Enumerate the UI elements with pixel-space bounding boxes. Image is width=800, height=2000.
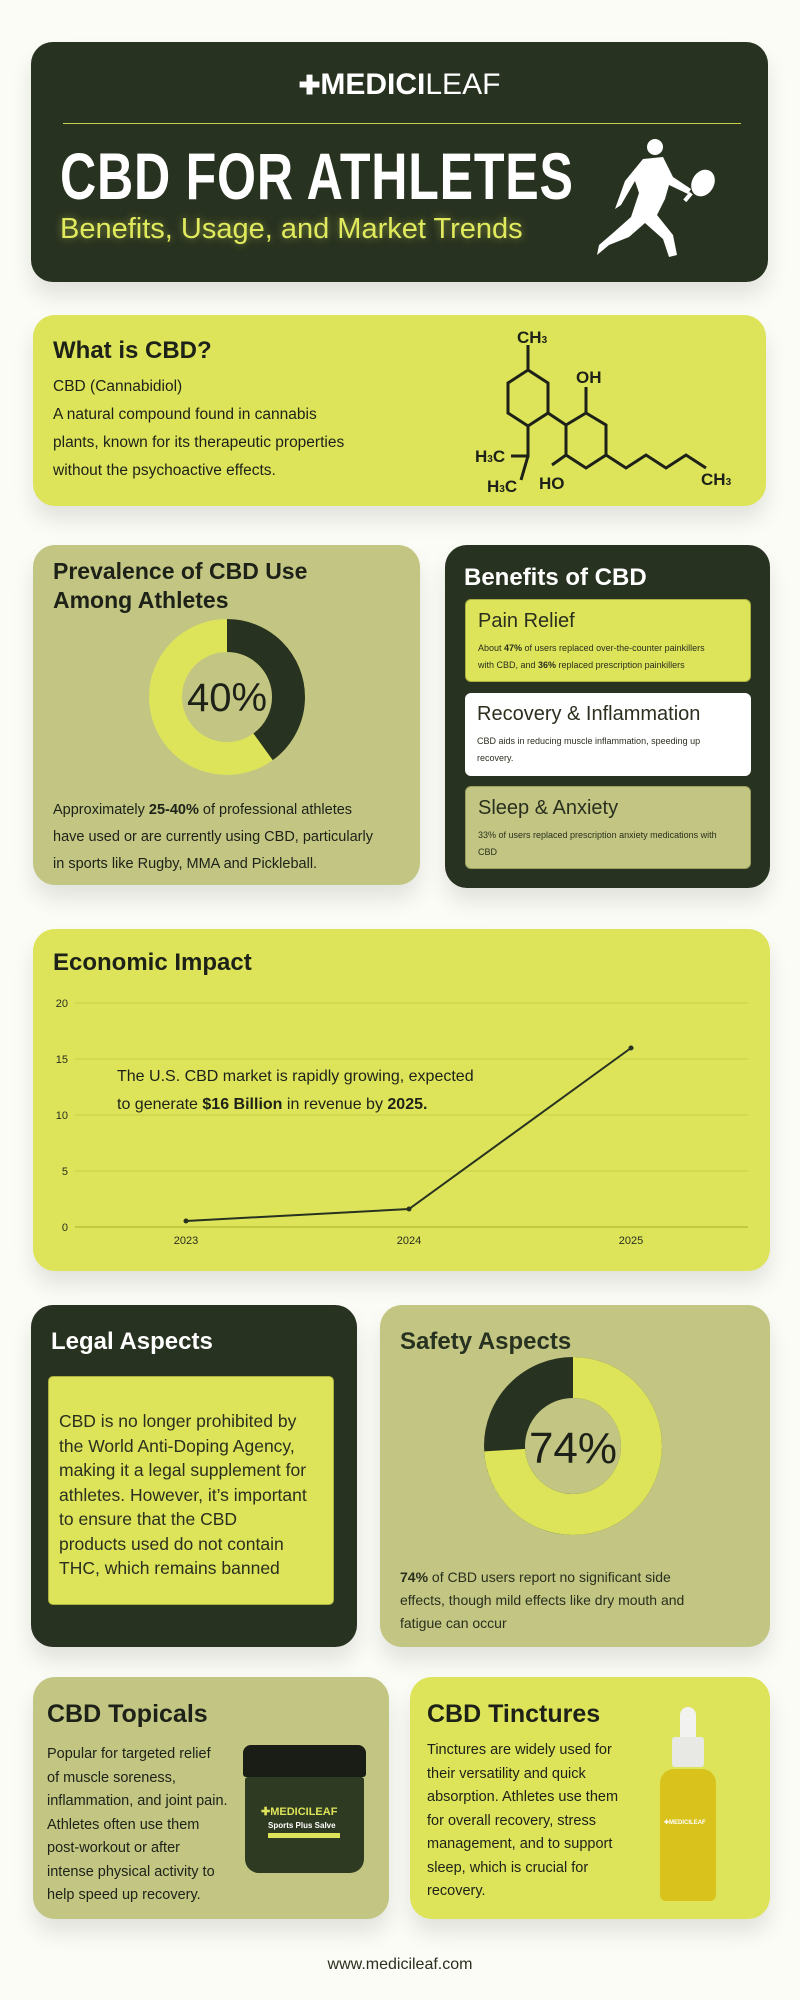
- card: pain relief: About 47% of users replaced over-the-counter painkillers: [478, 643, 705, 653]
- icon: CBD molecule: H3C: [487, 477, 517, 496]
- text block: intense physical activity to: [47, 1864, 215, 1880]
- line chart: [56, 998, 748, 1247]
- icon: pickleball athlete: [597, 139, 715, 257]
- line chart: 15: [56, 1054, 68, 1066]
- icon: CBD molecule: CH3: [517, 328, 548, 347]
- header banner: [31, 42, 768, 282]
- text block: [400, 1569, 684, 1631]
- donut chart 40%: 40%: [187, 676, 267, 720]
- callout text: [117, 1068, 474, 1113]
- line chart: 5: [62, 1166, 68, 1178]
- text block: inflammation, and joint pain.: [47, 1793, 228, 1809]
- text block: for overall recovery, stress: [427, 1812, 596, 1828]
- logo: ✚MEDICILEAF: [299, 68, 500, 101]
- subtitle: Benefits, Usage, and Market Trends: [60, 213, 523, 245]
- heading: CBD Tinctures: [427, 1700, 600, 1728]
- text block: without the psychoactive effects.: [53, 462, 276, 479]
- line chart: 10: [56, 1110, 68, 1122]
- callout text: to generate $16 Billion in revenue by 2025.: [117, 1096, 427, 1113]
- text block: sleep, which is crucial for: [427, 1860, 588, 1876]
- card: recovery: CBD aids in reducing muscle inflammation, speeding up: [477, 736, 700, 746]
- text block: [53, 378, 344, 479]
- heading: Safety Aspects: [400, 1328, 571, 1355]
- text block: Athletes often use them: [47, 1816, 199, 1832]
- callout text: The U.S. CBD market is rapidly growing, expected: [117, 1068, 474, 1085]
- heading: Legal Aspects: [51, 1328, 213, 1355]
- text block: management, and to support: [427, 1836, 612, 1852]
- text box: the World Anti-Doping Agency,: [59, 1436, 295, 1456]
- panel: CBD topicals: [33, 1677, 389, 1919]
- heading: [53, 558, 307, 613]
- icon: salve jar: ✚MEDICILEAF: [261, 1806, 337, 1818]
- text block: plants, known for its therapeutic properties: [53, 434, 344, 451]
- text block: help speed up recovery.: [47, 1887, 201, 1903]
- panel: economic impact: [33, 929, 770, 1271]
- footer url: www.medicileaf.com: [328, 1956, 472, 1973]
- card: sleep: [465, 786, 751, 869]
- icon: salve jar: [243, 1745, 366, 1873]
- text block: Tinctures are widely used for: [427, 1742, 612, 1758]
- text box: products used do not contain: [59, 1534, 284, 1554]
- text block: Approximately 25-40% of professional athletes: [53, 802, 352, 818]
- donut chart 40%: [149, 619, 305, 775]
- heading: Benefits of CBD: [464, 564, 647, 591]
- card: recovery: [465, 693, 751, 776]
- text box: THC, which remains banned: [59, 1558, 280, 1578]
- line chart: 20: [56, 998, 68, 1010]
- icon: CBD molecule: CH3: [701, 470, 732, 489]
- heading: Economic Impact: [53, 949, 252, 976]
- heading: Prevalence of CBD Use: [53, 558, 307, 584]
- icon: CBD molecule: [475, 328, 732, 496]
- text block: have used or are currently using CBD, particularly: [53, 829, 373, 845]
- panel: benefits: [445, 545, 770, 888]
- text block: post-workout or after: [47, 1840, 180, 1856]
- text box: athletes. However, it’s important: [59, 1484, 307, 1504]
- text block: A natural compound found in cannabis: [53, 406, 317, 423]
- text block: [53, 802, 373, 872]
- heading: CBD Topicals: [47, 1700, 208, 1728]
- text block: Popular for targeted relief: [47, 1746, 211, 1762]
- icon: CBD molecule: HO: [539, 474, 564, 493]
- text block: 74% of CBD users report no significant side: [400, 1569, 671, 1585]
- icon: salve jar: Sports Plus Salve: [268, 1821, 336, 1830]
- donut chart 74%: [484, 1357, 662, 1535]
- text box: CBD is no longer prohibited by: [59, 1411, 296, 1431]
- heading: What is CBD?: [53, 337, 212, 364]
- icon: CBD molecule: OH: [576, 368, 602, 387]
- text block: of muscle soreness,: [47, 1770, 176, 1786]
- text block: [47, 1746, 228, 1903]
- card: pain relief: Pain Relief: [478, 610, 575, 632]
- title: CBD FOR ATHLETES: [60, 139, 574, 213]
- text box: [48, 1376, 334, 1605]
- line chart: 2023: [174, 1235, 198, 1247]
- panel: CBD tinctures: [410, 1677, 770, 1919]
- line chart: 0: [62, 1222, 68, 1234]
- card: pain relief: with CBD, and 36% replaced prescription painkillers: [478, 660, 685, 670]
- text block: their versatility and quick: [427, 1766, 586, 1782]
- icon: tincture bottle: [660, 1707, 716, 1901]
- text block: CBD (Cannabidiol): [53, 378, 182, 395]
- icon: CBD molecule: H3C: [475, 447, 505, 466]
- text box: to ensure that the CBD: [59, 1509, 237, 1529]
- text block: fatigue can occur: [400, 1615, 507, 1631]
- card: sleep: CBD: [478, 847, 497, 857]
- panel: legal aspects: [31, 1305, 357, 1647]
- panel: prevalence: [33, 545, 420, 885]
- card: pain relief: [465, 599, 751, 682]
- card: sleep: Sleep & Anxiety: [478, 797, 618, 819]
- text block: [427, 1742, 618, 1899]
- panel: safety aspects: [380, 1305, 770, 1647]
- panel: what is CBD: [33, 315, 766, 506]
- line chart: 2024: [397, 1235, 421, 1247]
- text block: absorption. Athletes use them: [427, 1789, 618, 1805]
- text box: making it a legal supplement for: [59, 1460, 306, 1480]
- text block: recovery.: [427, 1883, 486, 1899]
- line chart: 2025: [619, 1235, 643, 1247]
- card: sleep: 33% of users replaced prescription anxiety medications with: [478, 830, 717, 840]
- donut chart 74%: 74%: [529, 1424, 617, 1473]
- icon: tincture bottle: ✚MEDICILEAF: [664, 1820, 706, 1826]
- card: recovery: recovery.: [477, 753, 513, 763]
- text block: effects, though mild effects like dry mouth and: [400, 1592, 684, 1608]
- heading: Among Athletes: [53, 587, 228, 613]
- text block: in sports like Rugby, MMA and Pickleball.: [53, 856, 317, 872]
- card: recovery: Recovery & Inflammation: [477, 703, 700, 725]
